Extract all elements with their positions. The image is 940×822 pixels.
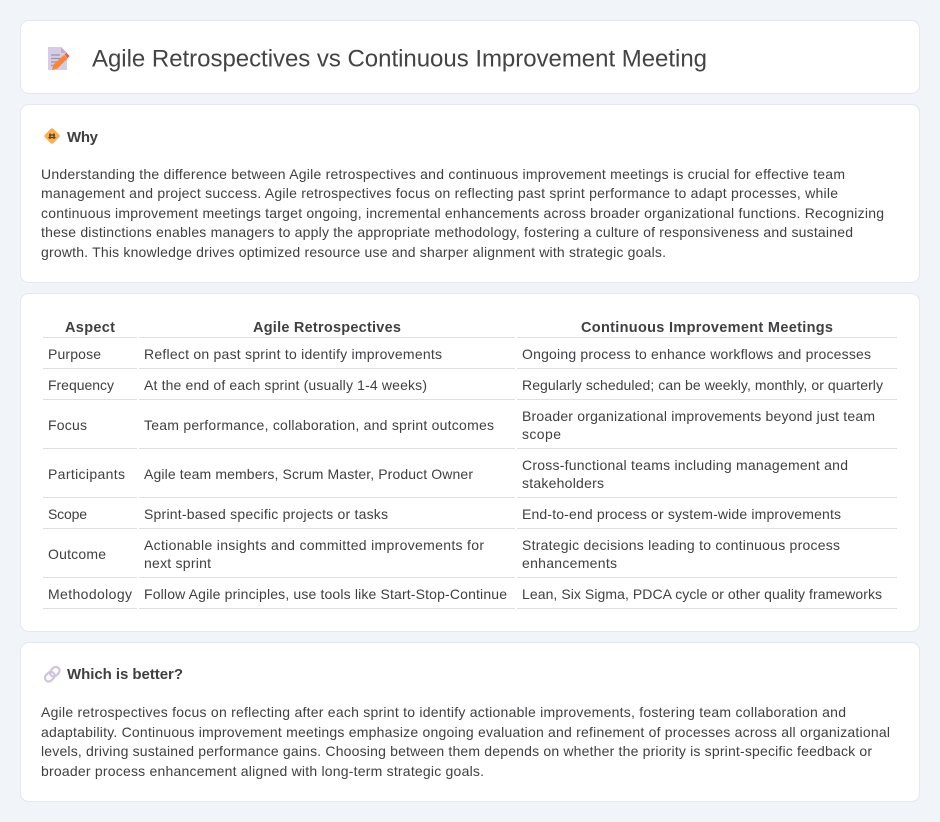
text block: why: these distinctions enables managers to apply the appropriate methodology, fostering a culture of responsiveness and sustained: [41, 224, 853, 240]
row: focus: Focus: [48, 417, 87, 433]
row: outcome: enhancements: [522, 555, 617, 571]
text block: which is better: Agile retrospectives focus on reflecting after each sprint to identify actionable improvements, fostering team collaboration and: [41, 704, 846, 720]
text block: why: management and project success. Agile retrospectives focus on reflecting past sprint performance to adapt processes, while: [41, 185, 838, 201]
row: scope: End-to-end process or system-wide improvements: [522, 506, 841, 522]
row: methodology: Lean, Six Sigma, PDCA cycle or other quality frameworks: [522, 586, 882, 602]
text block: which is better: broader process enhancement aligned with long-term strategic goals.: [41, 763, 484, 779]
row: participants: Participants: [48, 466, 125, 482]
text block: which is better: adaptability. Continuous improvement meetings emphasize ongoing evaluation and refinement of processes across all organizational: [41, 724, 890, 740]
row: participants: Cross-functional teams including management and: [522, 457, 848, 473]
row: outcome: Outcome: [48, 546, 106, 562]
row: methodology: Methodology: [48, 586, 132, 602]
row: participants: [48, 457, 848, 491]
text block: why: Understanding the difference between Agile retrospectives and continuous improvement meetings is crucial for effective team: [41, 166, 845, 182]
row: outcome: next sprint: [144, 555, 211, 571]
icon: memo with pencil: [48, 47, 70, 70]
row: purpose: Ongoing process to enhance workflows and processes: [522, 346, 871, 362]
table header: Aspect: [65, 320, 115, 336]
icon: link: [43, 665, 61, 683]
heading: which is better: Which is better?: [67, 666, 183, 683]
icon: diamond sign: [44, 128, 60, 144]
text block: why: [41, 166, 884, 260]
panel: which is better: [20, 642, 920, 802]
row: participants: stakeholders: [522, 475, 604, 491]
row: scope: Sprint-based specific projects or tasks: [144, 506, 388, 522]
row: outcome: Strategic decisions leading to continuous process: [522, 537, 840, 553]
row: focus: [48, 408, 875, 442]
row: outcome: [48, 537, 840, 571]
row: scope: Scope: [48, 506, 87, 522]
row: frequency: At the end of each sprint (usually 1-4 weeks): [144, 377, 427, 393]
row: focus: scope: [522, 426, 561, 442]
row: participants: Agile team members, Scrum Master, Product Owner: [144, 466, 473, 482]
row: methodology: Follow Agile principles, use tools like Start-Stop-Continue: [144, 586, 507, 602]
row: purpose: Purpose: [48, 346, 101, 362]
heading: why: Why: [67, 129, 99, 146]
row: frequency: Frequency: [48, 377, 114, 393]
row: purpose: Reflect on past sprint to identify improvements: [144, 346, 442, 362]
text block: which is better: [41, 704, 890, 779]
title: Agile Retrospectives vs Continuous Improvement Meeting: [92, 46, 707, 72]
table header: Continuous Improvement Meetings: [581, 320, 833, 336]
row: frequency: Regularly scheduled; can be weekly, monthly, or quarterly: [522, 377, 883, 393]
panel: why: [20, 104, 920, 282]
table header: [65, 320, 833, 336]
text block: which is better: levels, driving sustained performance gains. Choosing between them depends on whether the priority is sprint-specific feedback or: [41, 743, 872, 759]
panel: header: [20, 20, 920, 94]
panel: comparison table: [20, 294, 920, 632]
table header: Agile Retrospectives: [253, 320, 401, 336]
row: focus: Team performance, collaboration, and sprint outcomes: [144, 417, 494, 433]
row: outcome: Actionable insights and committed improvements for: [144, 537, 484, 553]
row: purpose: [48, 346, 871, 362]
text block: why: growth. This knowledge drives optimized resource use and sharper alignment with strategic goals.: [41, 244, 666, 260]
row: scope: [48, 506, 841, 522]
text block: why: continuous improvement meetings target ongoing, incremental enhancements across broader organizational functions. Recognizing: [41, 205, 884, 221]
row: frequency: [48, 377, 883, 393]
row: methodology: [48, 586, 882, 602]
row: focus: Broader organizational improvements beyond just team: [522, 408, 875, 424]
